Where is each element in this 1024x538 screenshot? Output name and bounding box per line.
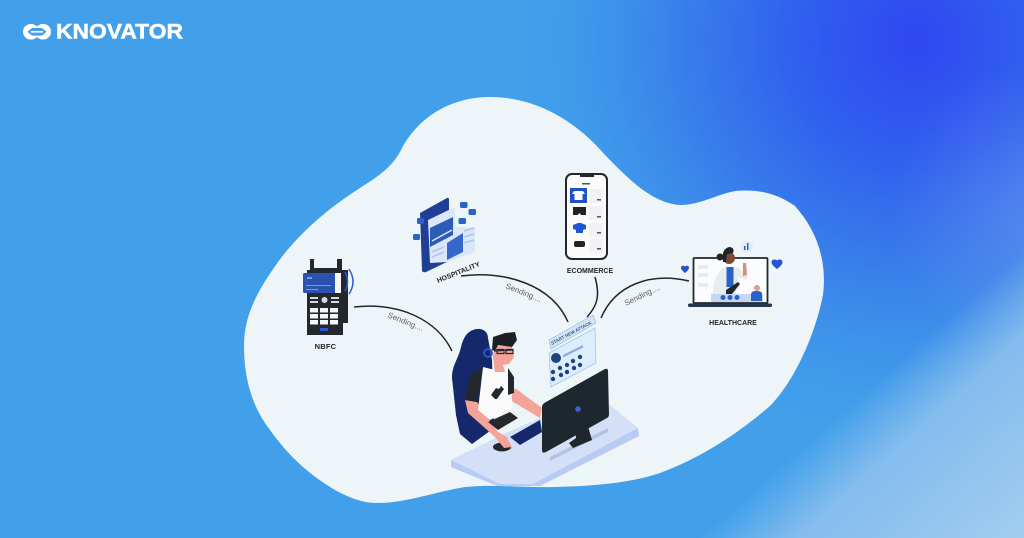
label: NBFC: NBFC <box>315 342 337 351</box>
arms <box>465 388 542 450</box>
icon: heart small <box>681 266 689 273</box>
icon: chart bubble <box>741 241 753 253</box>
headset <box>484 349 492 357</box>
operator body <box>465 332 542 452</box>
label: ecommerce: ECOMMERCE <box>567 268 613 275</box>
illustration: operator at desk <box>451 315 639 486</box>
sending label NBFC: Sending.... <box>386 311 425 333</box>
icon: logo link <box>23 24 51 40</box>
connector: healthcare to operator <box>601 278 689 318</box>
shirt emblem <box>491 386 504 399</box>
sleeves <box>465 367 514 402</box>
neck and face <box>493 345 514 372</box>
keyboard <box>510 420 542 445</box>
trousers <box>488 412 518 430</box>
hair <box>492 332 517 351</box>
label: hospitality: HOSPITALITY <box>436 261 481 285</box>
icon: ecommerce smartphone <box>566 174 607 259</box>
icon: healthcare telemedicine laptop <box>681 241 782 307</box>
floating attack panel <box>549 315 596 387</box>
icon: monitor logo <box>575 406 581 412</box>
icon: hospitality web pages <box>413 198 476 272</box>
background blob panel <box>244 97 824 503</box>
mouse <box>493 442 511 452</box>
logo wordmark: KNOVATOR <box>56 20 183 44</box>
desk <box>451 405 639 486</box>
monitor <box>542 369 609 453</box>
floating attack panel: START NEW ATTACK <box>550 320 593 346</box>
sending label hospitality: Sending.... <box>504 282 543 304</box>
connector: NBFC to operator <box>354 306 452 351</box>
monitor stand <box>569 423 592 448</box>
hand <box>495 436 512 448</box>
icon: NBFC payment terminal <box>303 259 353 335</box>
shirt <box>478 364 513 420</box>
chair <box>452 329 494 444</box>
label: healthcare: HEALTHCARE <box>709 320 757 327</box>
connector: ecommerce to operator <box>587 277 598 317</box>
connector: hospitality to operator <box>461 275 568 322</box>
logo <box>23 20 183 44</box>
glasses <box>494 350 513 354</box>
icon: heart large <box>772 260 782 269</box>
sending label healthcare: Sending.... <box>623 283 661 308</box>
